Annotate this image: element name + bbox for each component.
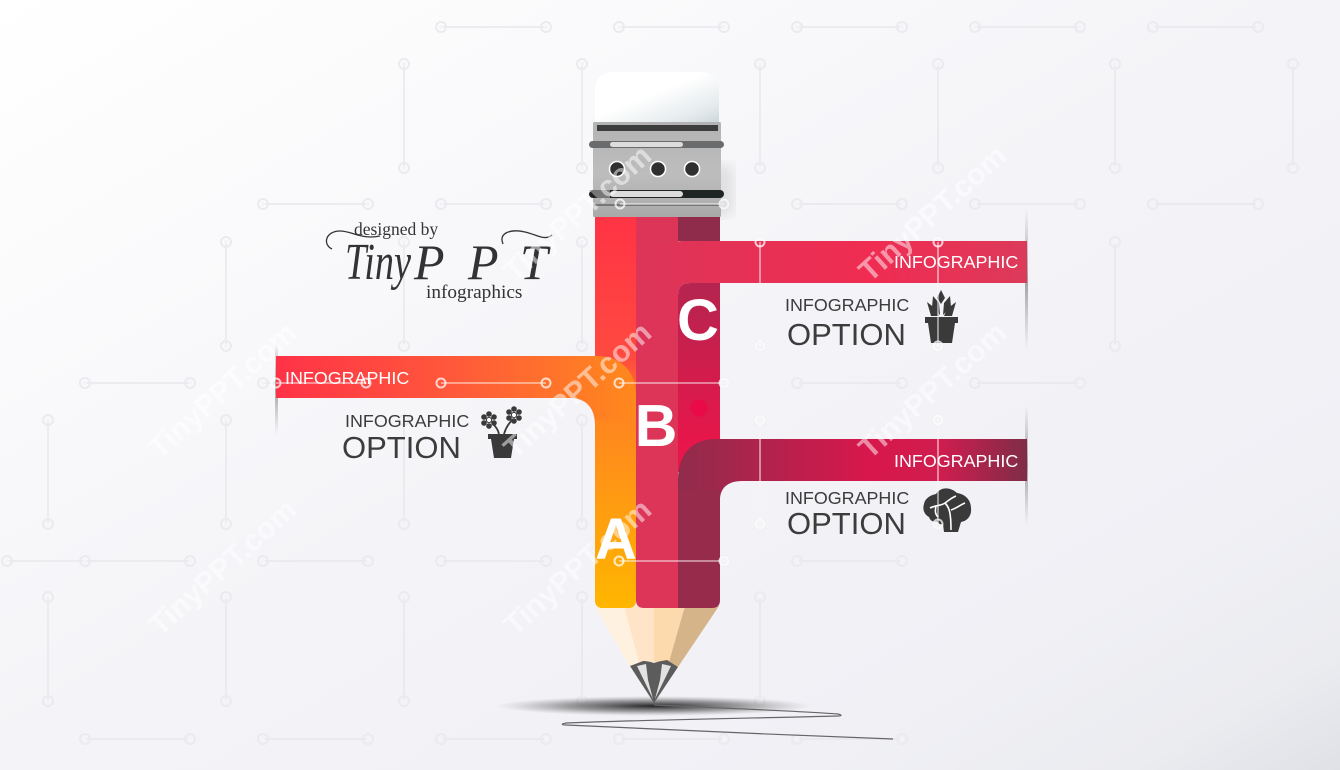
logo: designed by TinyPPT infographics: Tiny bbox=[345, 234, 412, 291]
letter A: A bbox=[595, 507, 637, 572]
band C bbox=[678, 439, 1027, 500]
column C top cap bbox=[678, 217, 720, 241]
logo: designed by TinyPPT infographics: PPT bbox=[413, 234, 551, 290]
grid overlay on pencil bbox=[276, 204, 938, 561]
band A bbox=[276, 356, 636, 470]
watermarks: TinyPPT.com bbox=[498, 493, 658, 642]
watermarks: TinyPPT.com bbox=[853, 316, 1013, 465]
watermarks: TinyPPT.com bbox=[143, 493, 303, 642]
pencil bbox=[276, 72, 1027, 739]
column A with left band bbox=[595, 217, 636, 608]
icon: succulent plant bbox=[925, 290, 958, 343]
red dot bbox=[690, 400, 708, 416]
icon: brain bbox=[923, 488, 971, 532]
icon: potted flowers bbox=[481, 406, 522, 458]
logo: designed by TinyPPT infographics: infographics bbox=[426, 282, 522, 303]
column C upper bbox=[678, 283, 720, 472]
option text top right: OPTION bbox=[787, 317, 906, 352]
logo: designed by TinyPPT infographics bbox=[326, 219, 552, 303]
band B bbox=[636, 241, 1027, 330]
ferrule drop shadow bbox=[705, 165, 733, 215]
logo: designed by TinyPPT infographics: designed by bbox=[354, 219, 438, 239]
graphite point bbox=[630, 660, 678, 703]
band label C: INFOGRAPHIC bbox=[894, 252, 1018, 272]
band end shadows bbox=[275, 208, 1028, 525]
column A lower overlay bbox=[595, 420, 636, 608]
watermarks: TinyPPT.com bbox=[498, 316, 658, 465]
column C lower bbox=[678, 478, 720, 608]
letter C: C bbox=[677, 288, 719, 353]
eraser bbox=[595, 72, 719, 122]
watermarks: TinyPPT.com bbox=[143, 316, 303, 465]
option text left: OPTION bbox=[342, 430, 461, 465]
band label B: INFOGRAPHIC bbox=[894, 451, 1018, 471]
option text bottom right bbox=[785, 488, 909, 541]
option text top right bbox=[785, 295, 909, 352]
scribble line bbox=[562, 705, 893, 739]
option text bottom right: INFOGRAPHIC bbox=[785, 488, 909, 508]
watermarks: TinyPPT.com bbox=[498, 139, 658, 288]
ferrule bbox=[589, 122, 724, 217]
option text bottom right: OPTION bbox=[787, 506, 906, 541]
wood tip bbox=[595, 606, 719, 667]
pencil ground shadow bbox=[496, 696, 812, 716]
watermarks: TinyPPT.com bbox=[853, 139, 1013, 288]
option text top right: INFOGRAPHIC bbox=[785, 295, 909, 315]
option text left: INFOGRAPHIC bbox=[345, 411, 469, 431]
option text left bbox=[342, 411, 469, 465]
column B bbox=[636, 217, 678, 608]
watermarks bbox=[143, 139, 1013, 642]
band label A: INFOGRAPHIC bbox=[285, 368, 409, 388]
letter B: B bbox=[635, 393, 677, 459]
